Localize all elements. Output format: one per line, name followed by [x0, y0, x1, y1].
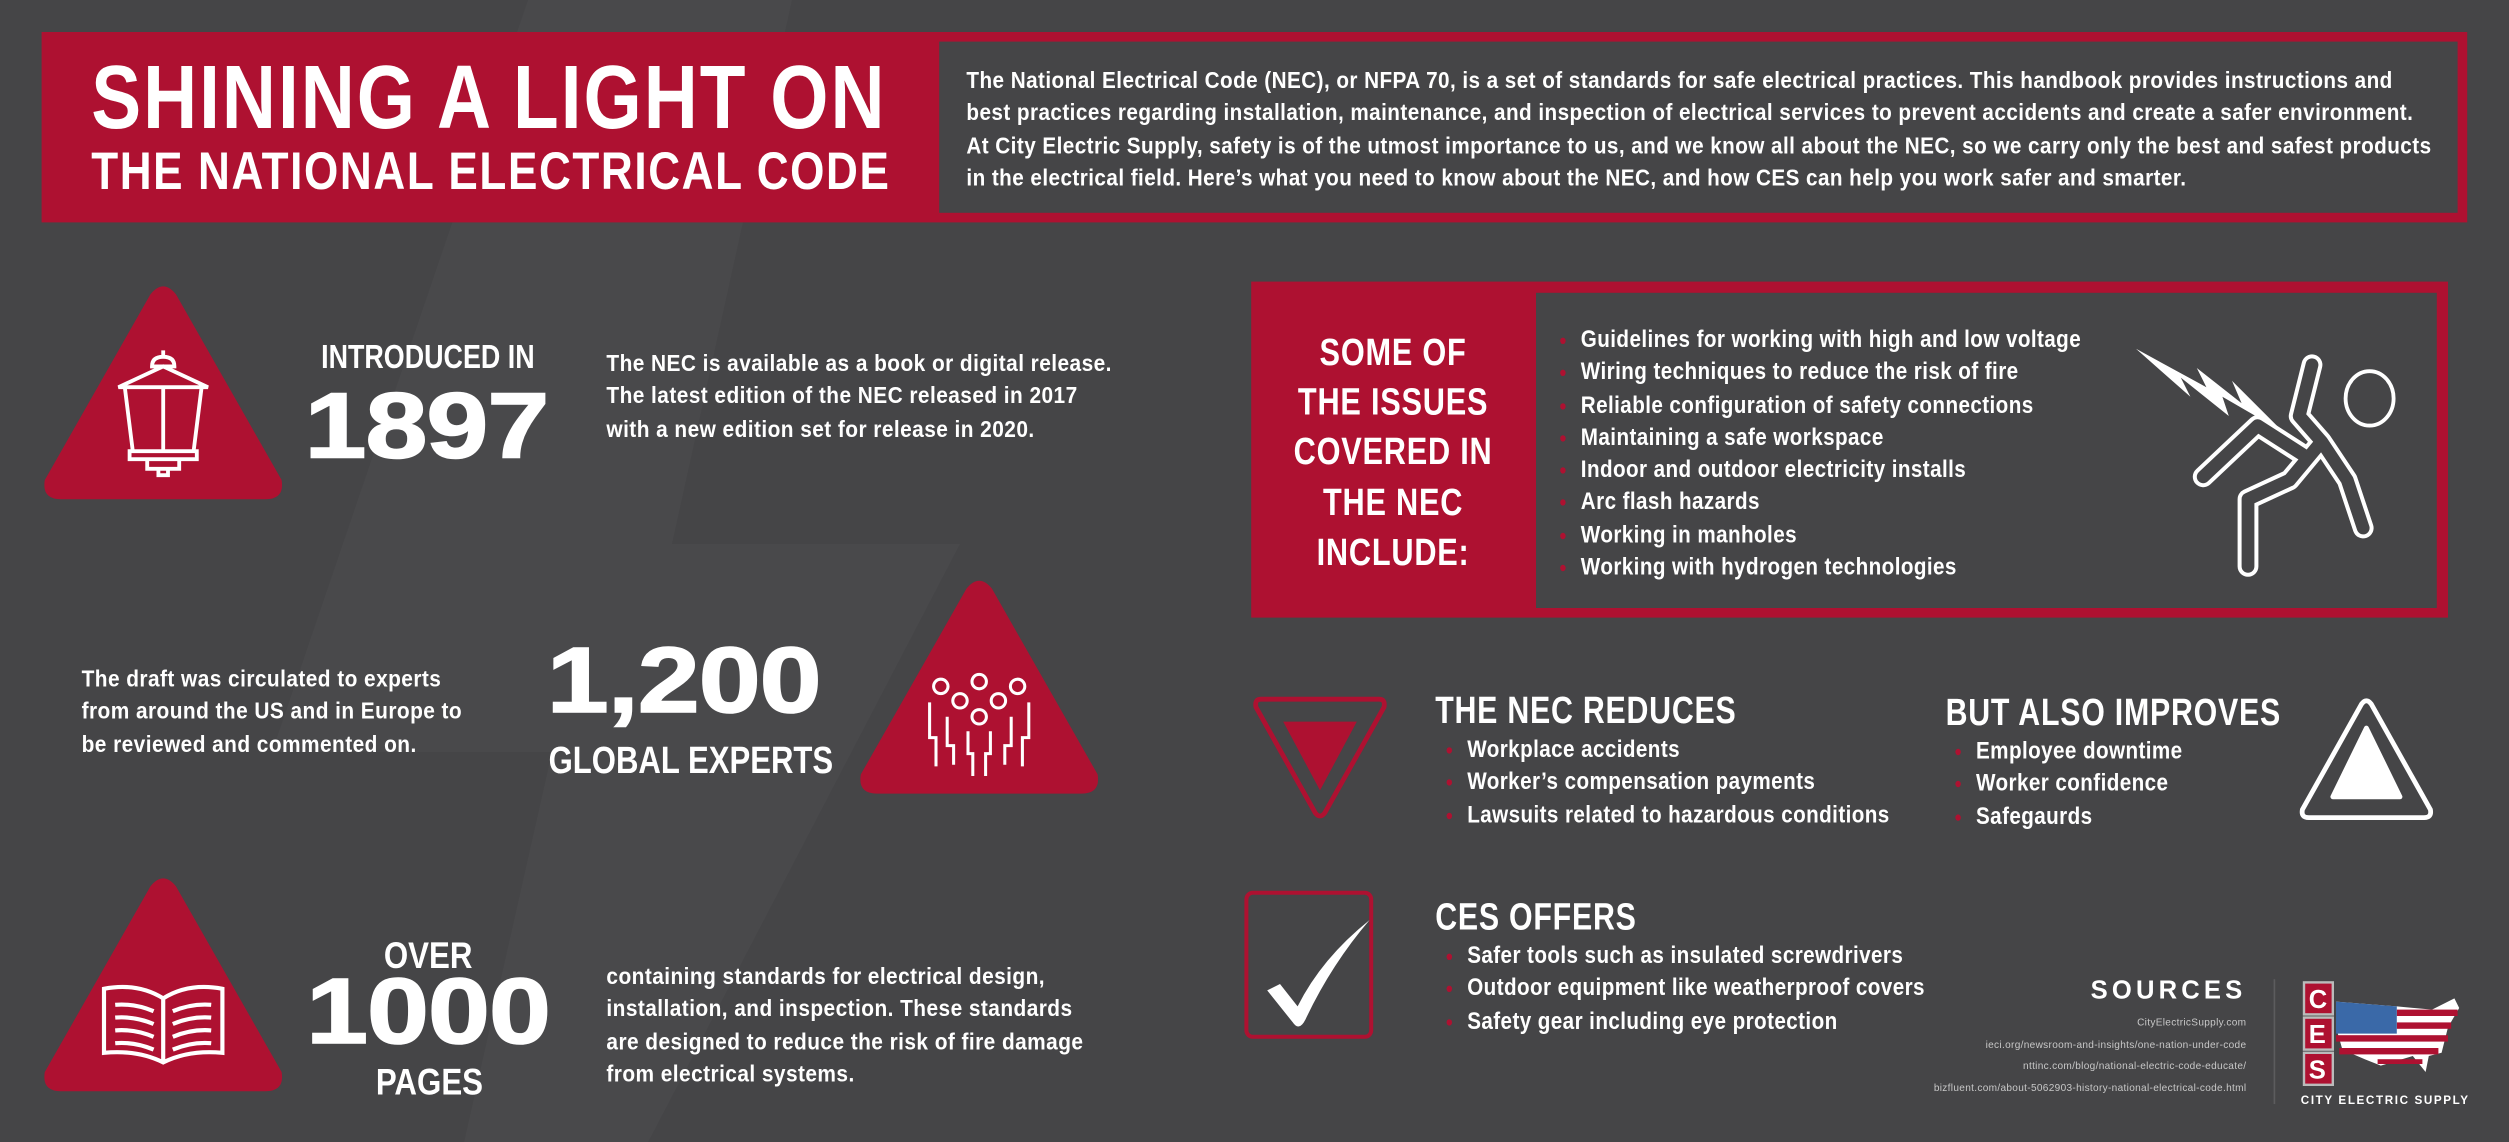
text: standards: are designed to reduce the risk of fire damage [606, 1030, 1083, 1055]
text: standards: from electrical systems. [606, 1062, 855, 1088]
issues list panel [1536, 293, 2437, 608]
icon: electrocuted person [2136, 349, 2396, 577]
text: draft circulated: be reviewed and commented on. [82, 732, 417, 758]
issues bullet list: Working with hydrogen technologies [1581, 554, 1957, 581]
stat: over 1000 pages: OVER [384, 934, 473, 976]
intro text panel: At City Electric Supply, safety is of the utmost importance to us, and we know all about the NEC, so we carry only the best and safest products [966, 134, 2432, 159]
text: standards [606, 965, 1083, 1088]
panel: issues covered [1251, 282, 2448, 618]
stat: over 1000 pages: PAGES [375, 1061, 482, 1102]
improves list: Worker confidence [1976, 770, 2168, 797]
section: CES offers: CES OFFERS [1435, 896, 1637, 939]
heading: issues: THE ISSUES [1298, 381, 1489, 424]
sources: bizfluent.com/about-5062903-history-national-electrical-code.html [1934, 1083, 2246, 1094]
section: NEC reduces [1435, 690, 1890, 828]
issues bullet list: Guidelines for working with high and low voltage [1581, 326, 2081, 354]
logo: City Electric Supply: C [2309, 986, 2327, 1014]
icon: checkbox [1244, 890, 1374, 1039]
offers list: Outdoor equipment like weatherproof covers [1467, 975, 1925, 1002]
improves list [1955, 738, 2183, 830]
stat: 1,200 global experts [546, 629, 833, 782]
heading: issues: THE NEC [1323, 481, 1464, 524]
improves list: Employee downtime [1976, 738, 2183, 765]
issues bullet list: Working in manholes [1581, 521, 1797, 548]
icon: down triangle [1253, 696, 1387, 818]
sources: CityElectricSupply.com [2137, 1018, 2246, 1029]
text: draft circulated [82, 667, 462, 758]
text: NEC availability [606, 352, 1112, 443]
offers list: Safety gear including eye protection [1467, 1007, 1838, 1035]
sources: nttinc.com/blog/national-electric-code-educate/ [2023, 1061, 2246, 1072]
title: THE NATIONAL ELECTRICAL CODE [91, 141, 891, 200]
stat: introduced 1897: 1897 [305, 374, 549, 478]
issues bullet list: Wiring techniques to reduce the risk of fire [1581, 359, 2019, 386]
stat: introduced 1897: INTRODUCED IN [320, 339, 534, 376]
heading: issues: COVERED IN [1294, 431, 1493, 474]
sources: SOURCES [2091, 978, 2246, 1005]
header banner [42, 32, 2467, 222]
intro text panel: in the electrical field. Here’s what you need to know about the NEC, and how CES can help you work safer and smarter. [966, 166, 2186, 192]
icon: up triangle [2300, 698, 2434, 820]
sources [1934, 978, 2246, 1094]
issues bullet list: Maintaining a safe workspace [1581, 424, 1884, 451]
title: SHINING A LIGHT ON [91, 46, 887, 147]
section: but also improves [1946, 691, 2281, 830]
sources: ieci.org/newsroom-and-insights/one-nation-under-code [1986, 1039, 2246, 1051]
logo: City Electric Supply: E [2309, 1021, 2326, 1049]
offers list: Safer tools such as insulated screwdrivers [1467, 942, 1903, 970]
reduces list: Worker’s compensation payments [1467, 768, 1815, 796]
reduces list: Lawsuits related to hazardous conditions [1467, 801, 1890, 828]
text: NEC availability: The latest edition of the NEC released in 2017 [606, 384, 1078, 410]
logo: City Electric Supply [2301, 981, 2470, 1107]
text: draft circulated: The draft was circulated to experts [82, 667, 441, 693]
icon: lamp triangle [44, 286, 282, 500]
text: NEC availability: with a new edition set for release in 2020. [606, 417, 1035, 443]
logo: City Electric Supply: CITY ELECTRIC SUPPLY [2301, 1093, 2470, 1107]
text: draft circulated: from around the US and in Europe to [82, 700, 462, 725]
text: standards: containing standards for electrical design, [606, 965, 1045, 990]
text: standards: installation, and inspection. These standards [606, 997, 1073, 1023]
stat: 1,200 global experts: 1,200 [546, 629, 820, 733]
issues bullet list: Reliable configuration of safety connections [1581, 391, 2034, 419]
icon: book triangle [44, 878, 282, 1092]
section: NEC reduces: THE NEC REDUCES [1435, 690, 1736, 733]
section: CES offers [1435, 896, 1925, 1035]
stat: over 1000 pages: 1000 [307, 960, 551, 1064]
intro text panel: best practices regarding installation, maintenance, and inspection of electrical services to prevent accidents and create a safer environment. [966, 101, 2413, 127]
heading: issues [1294, 331, 1493, 574]
issues bullet list [1560, 326, 2081, 581]
section: but also improves: BUT ALSO IMPROVES [1946, 691, 2281, 734]
text: NEC availability: The NEC is available as a book or digital release. [606, 352, 1112, 378]
heading: issues: SOME OF [1320, 331, 1467, 374]
reduces list [1446, 736, 1890, 828]
offers list [1446, 942, 1925, 1035]
issues bullet list: Arc flash hazards [1581, 489, 1760, 516]
title [91, 46, 891, 200]
improves list: Safegaurds [1976, 803, 2093, 830]
issues bullet list: Indoor and outdoor electricity installs [1581, 456, 1966, 484]
icon: experts triangle [860, 580, 1098, 794]
intro text panel [939, 42, 2458, 213]
logo: City Electric Supply: S [2309, 1056, 2326, 1084]
heading: issues: INCLUDE: [1317, 531, 1470, 574]
reduces list: Workplace accidents [1467, 736, 1680, 763]
intro text panel: The National Electrical Code (NEC), or NFPA 70, is a set of standards for safe electrical practices. This handbook provides instructions and [966, 69, 2393, 94]
stat: over 1000 pages [307, 934, 551, 1102]
stat: 1,200 global experts: GLOBAL EXPERTS [549, 739, 833, 782]
